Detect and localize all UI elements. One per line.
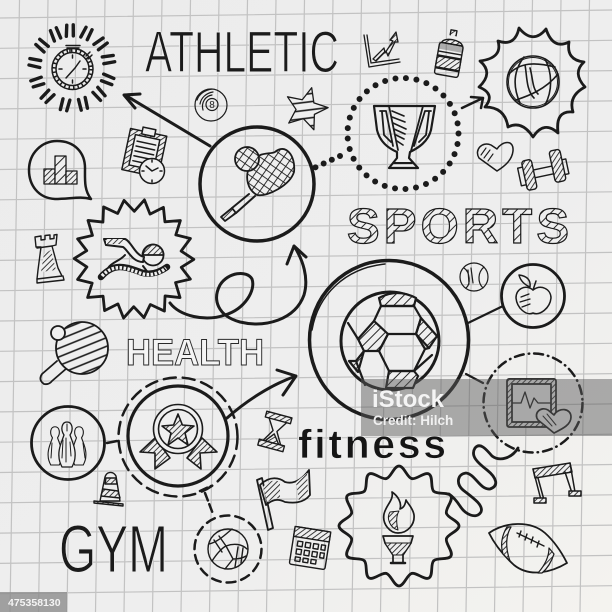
panel: soccer ball circle: [310, 260, 468, 420]
icon: apple: [516, 275, 551, 314]
panel: heart monitor dash-dot circle: [466, 354, 582, 452]
icon: swimmer: [101, 239, 167, 277]
icon: calendar: [289, 526, 331, 570]
watermark: image id: 475358130: [8, 597, 61, 609]
icon: hurdle: [533, 463, 581, 503]
panel: bowling circle: [32, 406, 117, 480]
panel: tennis racket circle: [200, 127, 314, 241]
icon: dumbbell: [516, 148, 571, 192]
panel: swimmer spiky badge: [65, 190, 203, 328]
icon: billiard 8 ball: 8: [209, 100, 215, 111]
connector: squiggle from monitor to torch: [449, 446, 518, 516]
icon: hand drawn heart: [477, 142, 513, 171]
heading: GYM: GYM: [59, 512, 168, 587]
icon: waving flag: [257, 470, 310, 530]
icon: water bottle: [434, 28, 466, 78]
arrow: racket to stopwatch: [124, 94, 210, 146]
arrow: medal to soccer ball: [227, 370, 296, 418]
icon: basketball: [507, 56, 559, 108]
icon: rising chart: [364, 32, 400, 67]
watermark: iStock credit band: Credit: Hilch: [373, 413, 453, 428]
icon: speech bubble with podium: [29, 141, 91, 199]
icon: bowling pins: [48, 422, 86, 467]
icon: billiard 8 ball: [195, 89, 227, 121]
icon: olympic torch: [383, 492, 414, 563]
watermark: iStock credit band: [361, 379, 612, 436]
arrow: trophy to basketball: [462, 97, 483, 108]
panel: dotted trophy circle: [314, 78, 458, 189]
icon: tennis racket and ball: [221, 147, 294, 221]
icon: clipboard with clock: [122, 125, 168, 184]
arrow: curly loop from swimmer to racket: [170, 246, 306, 324]
icon: volleyball: [208, 529, 248, 569]
icon: stopwatch with radiating ticks: [29, 25, 115, 111]
panel: apple circle: [468, 264, 564, 328]
heading: fitness: fitness: [298, 421, 446, 467]
icon: ping pong paddle: [40, 322, 108, 384]
icon: heart rate monitor: [507, 379, 571, 433]
watermark: iStock credit band: iStock: [372, 386, 445, 413]
panel: medal double circle: [118, 378, 238, 496]
panel: sun badge with basketball: [479, 28, 585, 137]
heading: SPORTS: SPORTS: [347, 200, 569, 254]
icon: american football: [489, 524, 567, 573]
icon: hourglass: [258, 411, 292, 452]
heading: ATHLETIC: ATHLETIC: [145, 20, 339, 85]
icon: trophy: [374, 106, 435, 168]
icon: tennis ball: [460, 263, 488, 291]
icon: rook chess piece: [35, 234, 64, 283]
panel: torch wavy gear badge: [339, 466, 459, 586]
icon: medal with ribbons: [140, 404, 217, 469]
icon: soccer ball: [341, 292, 439, 390]
icon: traffic cone: [94, 472, 123, 506]
panel: volleyball dashed circle: [194, 486, 262, 582]
icon: big hatched star: [281, 82, 332, 132]
watermark: image id: [0, 592, 67, 612]
heading: HEALTH: HEALTH: [126, 332, 264, 373]
